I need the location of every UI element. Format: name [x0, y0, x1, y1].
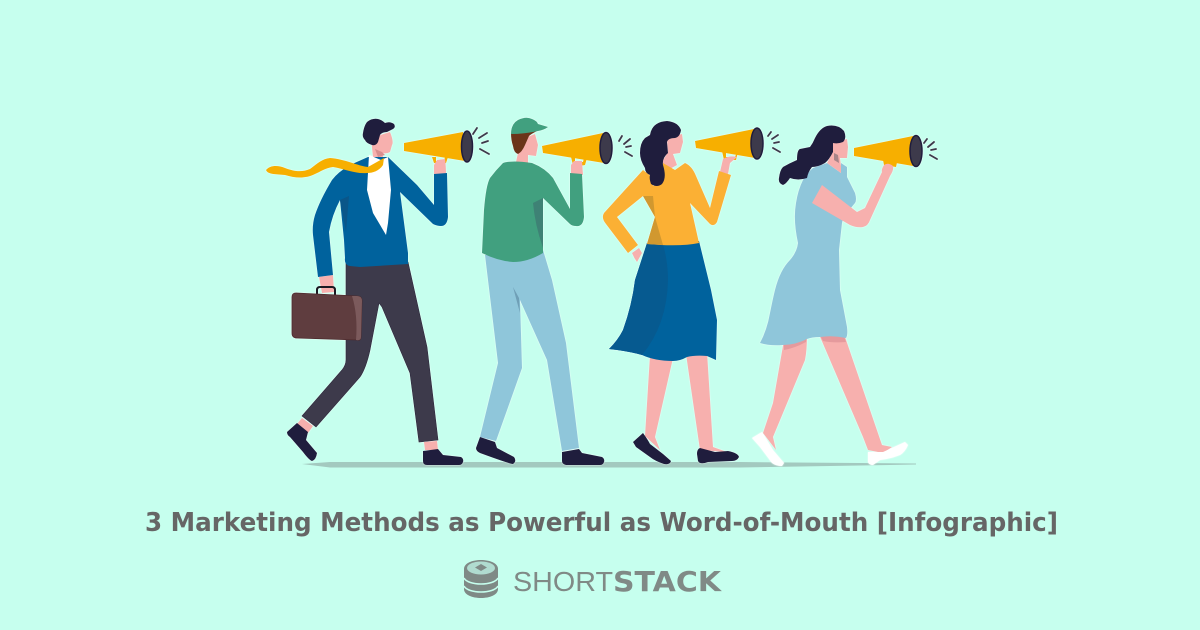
megaphone: [542, 132, 632, 166]
white shoes: [752, 432, 908, 466]
raised hand: [434, 159, 446, 175]
dark wavy hair: [779, 126, 845, 185]
lower hand: [632, 248, 642, 262]
logo icon: stacked discs: [464, 560, 498, 598]
figure: man in green sweater and cap: [476, 118, 632, 465]
megaphone: [854, 136, 937, 167]
neck shadow: [375, 149, 385, 157]
green sweater: [482, 162, 584, 262]
shoes: [476, 437, 604, 465]
briefcase: [292, 287, 362, 340]
white shirt: [367, 155, 391, 235]
ShortStack logo: [464, 560, 722, 598]
logo wordmark: SHORT: [513, 566, 613, 597]
neck and head: [827, 139, 848, 173]
figure: woman in light blue dress: [752, 126, 937, 466]
shoes: [633, 433, 739, 464]
jacket fold shadow: [340, 196, 349, 232]
megaphone: [695, 128, 780, 160]
logo wordmark: STACK: [613, 565, 722, 598]
shoes: [287, 423, 463, 465]
dark wavy hair: [640, 121, 681, 186]
title: 3 Marketing Methods as Powerful as Word-of-Mouth [Infographic]: [145, 508, 1058, 538]
hand holding briefcase: [319, 275, 334, 293]
jacket: [313, 157, 448, 277]
necktie blowing in wind: [266, 158, 384, 178]
neck and head: [516, 134, 538, 163]
brown hair: [511, 131, 537, 154]
figure: woman in yellow sweater and blue skirt: [603, 121, 780, 464]
figure: businessman with megaphone: [266, 119, 489, 465]
neck shadow: [834, 153, 839, 163]
leg shadow under dress: [784, 335, 846, 350]
megaphone: [404, 128, 489, 164]
green cap: [511, 118, 548, 134]
dress: [760, 163, 856, 345]
blue skirt: [609, 241, 717, 361]
raised hand: [720, 156, 737, 174]
ankles: [297, 418, 438, 450]
trousers: [302, 262, 438, 442]
legs: [645, 352, 727, 452]
sweater shadow: [643, 196, 663, 245]
ground shadow: [302, 462, 916, 468]
hair: [363, 119, 395, 145]
raised arm and hand: [812, 164, 893, 227]
yellow sweater: [603, 163, 731, 253]
raised hand: [571, 161, 583, 175]
sweater shadow: [533, 198, 543, 248]
head: [371, 132, 393, 160]
neck and head: [662, 134, 683, 170]
trousers: [480, 250, 579, 451]
legs: [763, 332, 892, 453]
trouser crease: [513, 287, 520, 313]
logo wordmark: [513, 565, 722, 598]
